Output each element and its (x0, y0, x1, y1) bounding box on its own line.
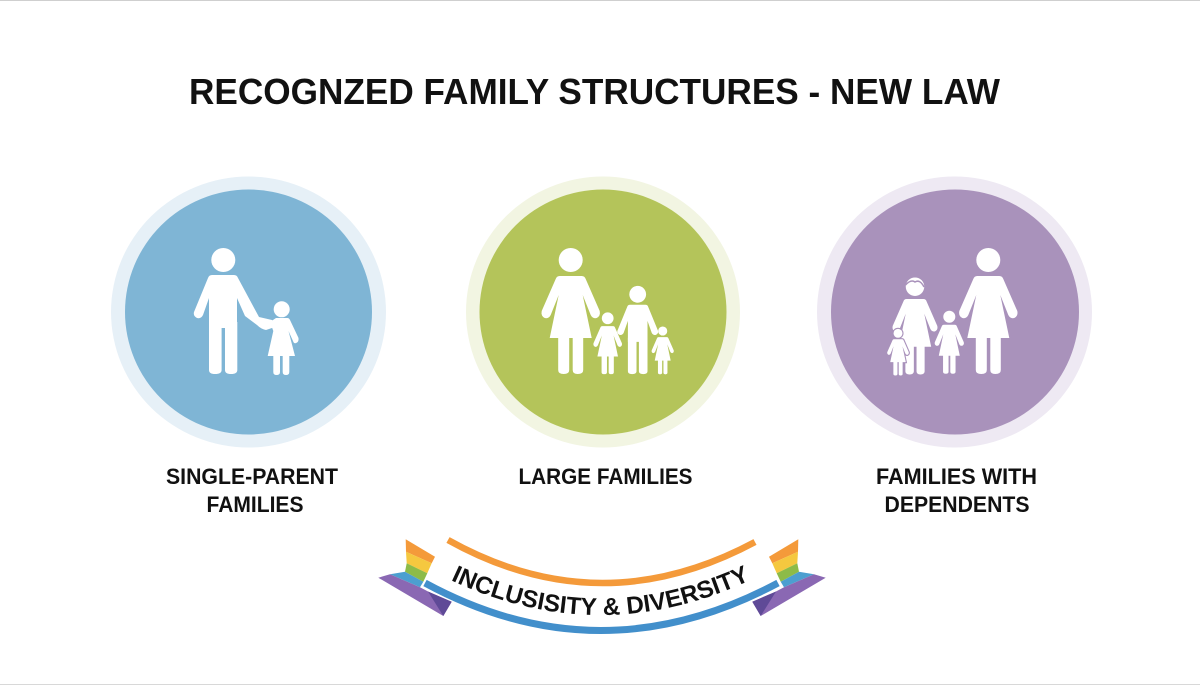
icon: parent and child holding hands (194, 248, 299, 375)
label: large families: LARGE FAMILIES (518, 464, 692, 489)
label: families with dependents: DEPENDENTS (884, 492, 1030, 517)
ribbon tail: left (378, 539, 452, 616)
ribbon tail: right (752, 539, 826, 616)
panel: large families (466, 176, 740, 489)
circle: purple (817, 176, 1092, 448)
circle: green (466, 176, 740, 448)
icon: adults with dependents (887, 248, 1018, 375)
icon: mother with three children (542, 248, 674, 374)
ribbon orange stripe (448, 540, 755, 583)
banner: inclusivity and diversity (378, 537, 826, 634)
banner text: INCLUSISITY & DIVERSITY (452, 565, 745, 616)
label: single-parent families: SINGLE-PARENT (166, 464, 339, 489)
ribbon blue stripe (425, 583, 778, 630)
panel: families with dependents (817, 176, 1092, 517)
label: families with dependents: FAMILIES WITH (876, 464, 1037, 489)
label: single-parent families: FAMILIES (206, 492, 304, 517)
circle: blue (111, 176, 386, 448)
title: RECOGNZED FAMILY STRUCTURES - NEW LAW (189, 71, 1000, 112)
panel: single-parent families (111, 176, 386, 517)
